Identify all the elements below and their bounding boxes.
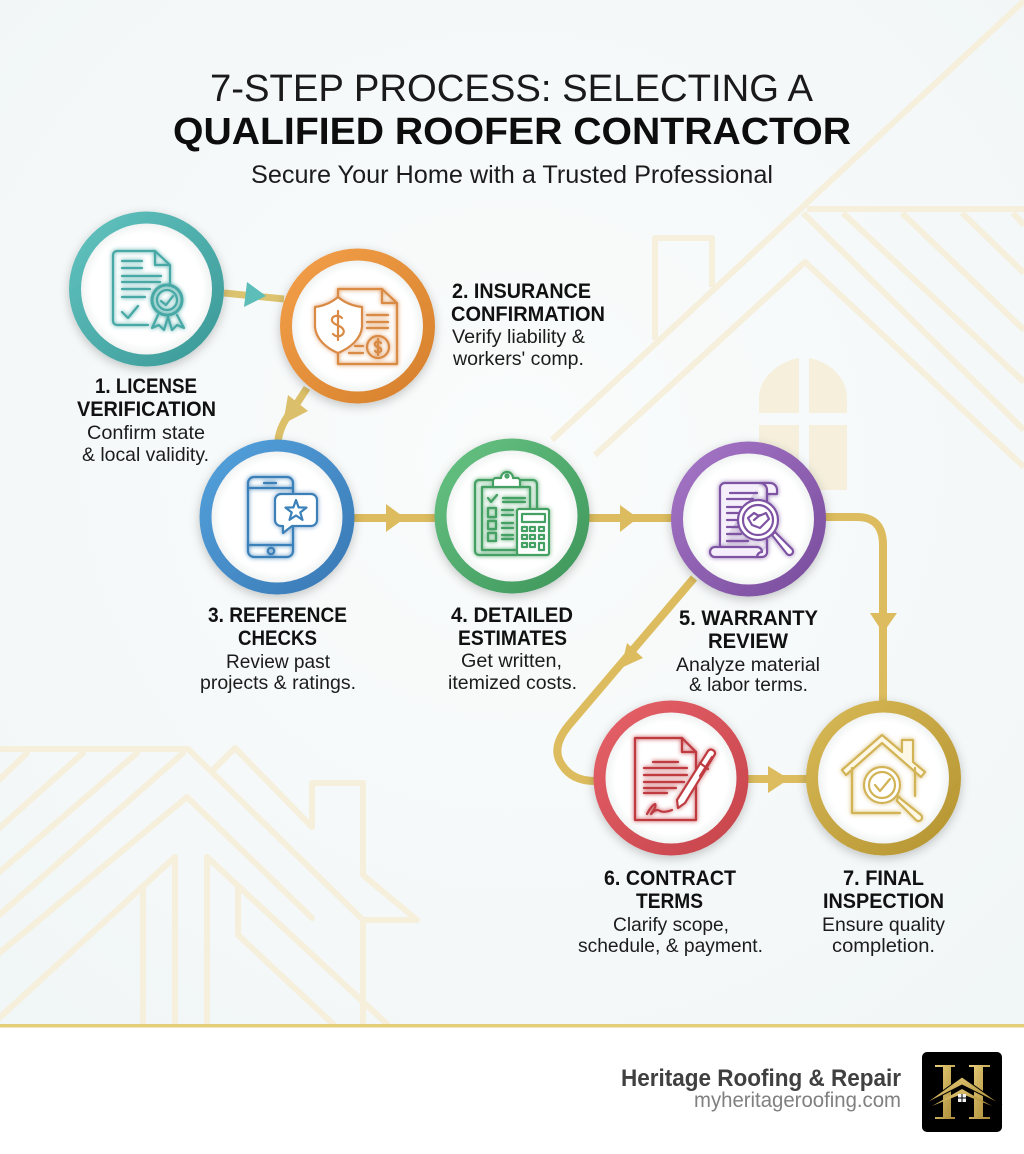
footer — [0, 1024, 1024, 1154]
label: 3. REFERENCE — [208, 604, 347, 627]
label: Confirm state — [87, 422, 205, 444]
label: VERIFICATION — [77, 398, 216, 421]
label: schedule, & payment. — [578, 935, 763, 957]
step 5: warranty review — [671, 442, 826, 696]
icon: house with magnifier — [842, 735, 925, 821]
label: INSPECTION — [823, 890, 944, 913]
label: 7. FINAL — [843, 867, 924, 890]
label — [822, 867, 945, 957]
label: workers' comp. — [452, 348, 584, 370]
arrow: step 2 to 3 — [278, 388, 308, 441]
label: 4. DETAILED — [451, 604, 573, 627]
label: REVIEW — [708, 630, 788, 653]
arrow: step 1 to 2 — [224, 282, 284, 307]
subtitle: Secure Your Home with a Trusted Professional — [251, 161, 773, 189]
label: ESTIMATES — [458, 627, 567, 650]
logo — [922, 1052, 1002, 1132]
icon: document with rosette — [113, 251, 184, 330]
step 3: reference checks — [200, 440, 356, 694]
label: Get written, — [461, 650, 562, 672]
label: Verify liability & — [452, 326, 585, 348]
label: Analyze material — [676, 654, 820, 676]
step 6: contract terms — [578, 700, 763, 957]
icon: scroll with magnifier and handshake — [710, 483, 793, 557]
label — [676, 607, 820, 696]
footer website: myheritageroofing.com — [694, 1089, 901, 1112]
badge — [280, 248, 435, 404]
label: TERMS — [636, 890, 703, 913]
arrow: step 5 to 6 — [557, 578, 694, 781]
label — [448, 604, 577, 694]
icon: contract and pen — [635, 738, 715, 820]
badge — [806, 700, 961, 856]
title — [173, 68, 851, 153]
step 2: insurance confirmation — [280, 248, 605, 404]
badge — [594, 700, 748, 856]
label: 5. WARRANTY — [679, 607, 818, 630]
badge — [200, 440, 354, 594]
background: house line art bottom left — [0, 748, 417, 1024]
icon: phone with star review — [248, 477, 317, 557]
label: CONFIRMATION — [451, 303, 605, 326]
icon: shield and policy — [315, 289, 397, 364]
badge — [434, 438, 590, 594]
arrow: step 3 to 4 — [354, 504, 436, 532]
label — [451, 280, 605, 370]
arrow: step 5 to 7 — [825, 517, 897, 702]
title line 1: 7-STEP PROCESS: SELECTING A — [210, 68, 814, 110]
title line 2: QUALIFIED ROOFER CONTRACTOR — [173, 111, 851, 153]
label: & local validity. — [82, 444, 209, 466]
label: projects & ratings. — [200, 672, 356, 694]
label: & labor terms. — [689, 674, 808, 696]
arrow: step 6 to 7 — [748, 766, 807, 793]
background: house line art top right — [552, 1, 1024, 490]
step 1: license verification — [69, 212, 224, 466]
footer company name: Heritage Roofing & Repair — [621, 1065, 901, 1092]
step 7: final inspection — [806, 700, 961, 957]
label: Ensure quality — [822, 914, 945, 936]
label: itemized costs. — [448, 672, 577, 694]
label: Clarify scope, — [613, 914, 729, 936]
step 4: detailed estimates — [434, 438, 590, 694]
label: 2. INSURANCE — [452, 280, 591, 303]
label: CHECKS — [238, 627, 317, 650]
badge — [671, 442, 826, 596]
arrow: step 4 to 5 — [589, 505, 673, 532]
label — [578, 867, 763, 957]
icon: clipboard and calculator — [475, 472, 549, 555]
label — [77, 375, 216, 466]
label: Review past — [226, 651, 331, 673]
badge — [69, 212, 224, 366]
label: 1. LICENSE — [95, 375, 197, 398]
label: completion. — [832, 935, 935, 957]
label — [200, 604, 356, 694]
label: 6. CONTRACT — [604, 867, 736, 890]
